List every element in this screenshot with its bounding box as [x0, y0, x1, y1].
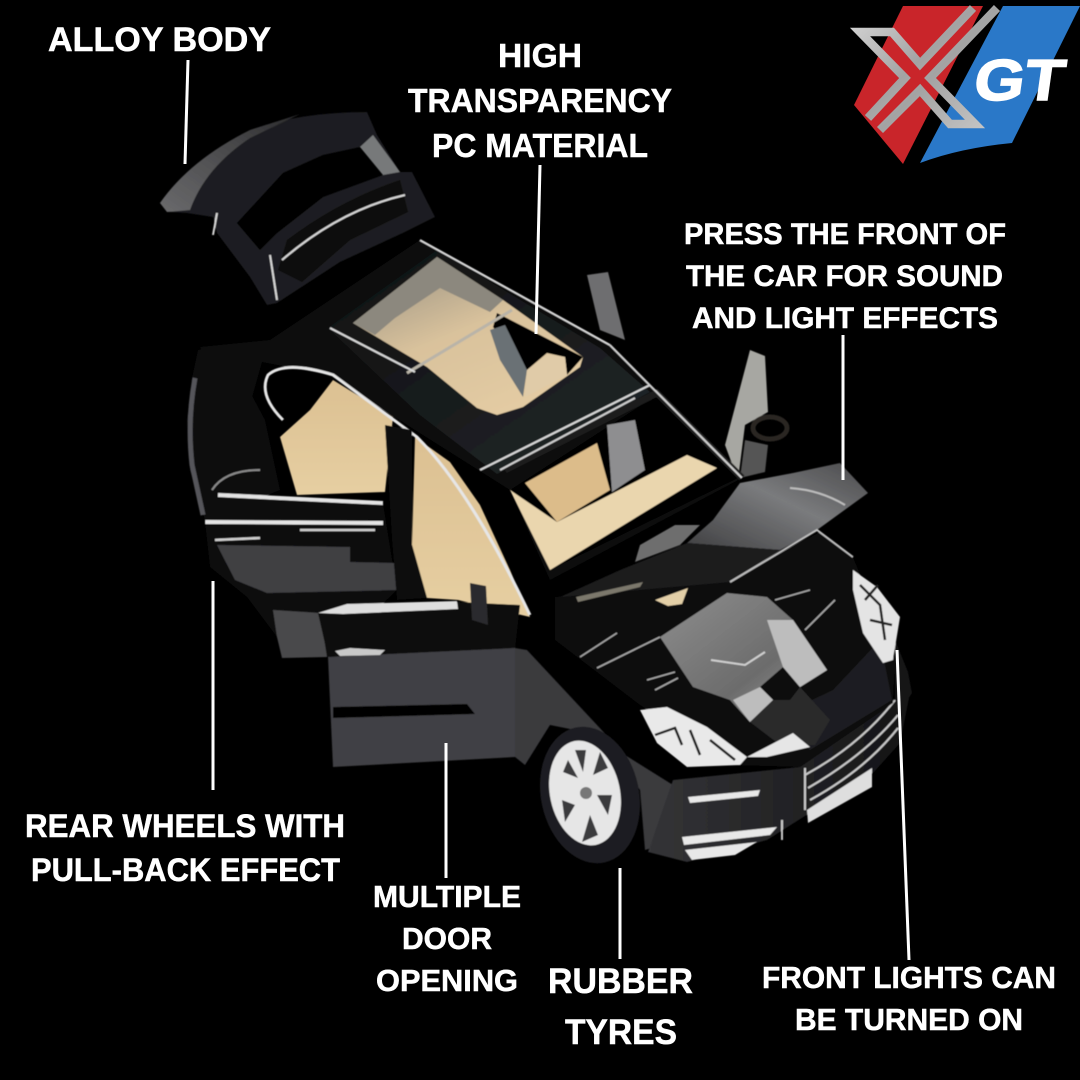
front door open: [318, 583, 520, 767]
open bonnet: [560, 463, 868, 606]
logo blue panel: [920, 6, 1080, 163]
label: multiple door opening: [373, 879, 521, 998]
front door opening interior: [412, 437, 530, 617]
label: multiple door opening: OPENING: [376, 963, 518, 998]
label: rear wheels: REAR WHEELS WITH: [25, 808, 345, 844]
label: high transparency pc material: [408, 37, 672, 164]
label: rear wheels: PULL-BACK EFFECT: [31, 852, 340, 888]
headlight left: [640, 707, 747, 767]
label: high transparency pc material: TRANSPARENCY: [408, 82, 672, 119]
rear door open: [205, 495, 398, 658]
label: front lights: [762, 960, 1056, 1037]
roof glass: [330, 240, 650, 470]
rear interior seats: [280, 380, 393, 495]
leader lines: [185, 60, 909, 960]
logo GT lettering: GT: [970, 48, 1069, 113]
label: alloy body: ALLOY BODY: [48, 21, 271, 59]
rear hatch raised: [160, 112, 435, 305]
label: press the front: PRESS THE FRONT OF: [684, 218, 1006, 251]
label: rubber tyres: [548, 962, 693, 1052]
wheel with rubber tyre: [528, 717, 652, 873]
windshield interior: [500, 345, 742, 570]
front bumper and grille: [648, 640, 912, 862]
label: front lights: BE TURNED ON: [795, 1002, 1023, 1037]
label: multiple door opening: MULTIPLE: [373, 879, 521, 914]
label: multiple door opening: DOOR: [402, 921, 492, 956]
label: press the front: [684, 218, 1006, 335]
illustration: black model car with open doors: [160, 112, 912, 873]
label: rubber tyres: RUBBER: [548, 962, 693, 1001]
far side door open: [587, 272, 787, 480]
label: front lights: FRONT LIGHTS CAN: [762, 960, 1056, 995]
front fender: [515, 648, 678, 850]
engine bay: [555, 532, 895, 767]
label: rubber tyres: TYRES: [565, 1013, 677, 1052]
roof panel: [328, 250, 650, 474]
headlight right: [853, 570, 900, 663]
label: high transparency pc material: HIGH: [498, 37, 582, 74]
label: press the front: AND LIGHT EFFECTS: [692, 302, 998, 335]
logo red panel: [854, 6, 983, 164]
label: rear wheels: [25, 808, 345, 888]
side chrome trims: [265, 368, 530, 615]
roof slab: [200, 240, 742, 580]
label: high transparency pc material: PC MATERIAL: [432, 127, 648, 164]
logo: XGT: [854, 6, 1080, 164]
label: press the front: THE CAR FOR SOUND: [686, 260, 1003, 293]
logo silver X: [860, 8, 997, 130]
pillar between doors: [385, 425, 427, 600]
rear body side: [187, 345, 280, 520]
